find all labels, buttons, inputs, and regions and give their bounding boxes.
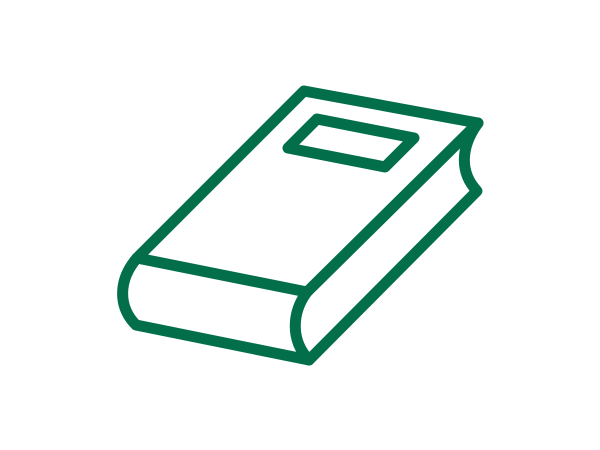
page block edge [309, 123, 478, 360]
spine [123, 258, 309, 360]
book cover outline [137, 91, 478, 292]
title label on cover [288, 119, 414, 167]
